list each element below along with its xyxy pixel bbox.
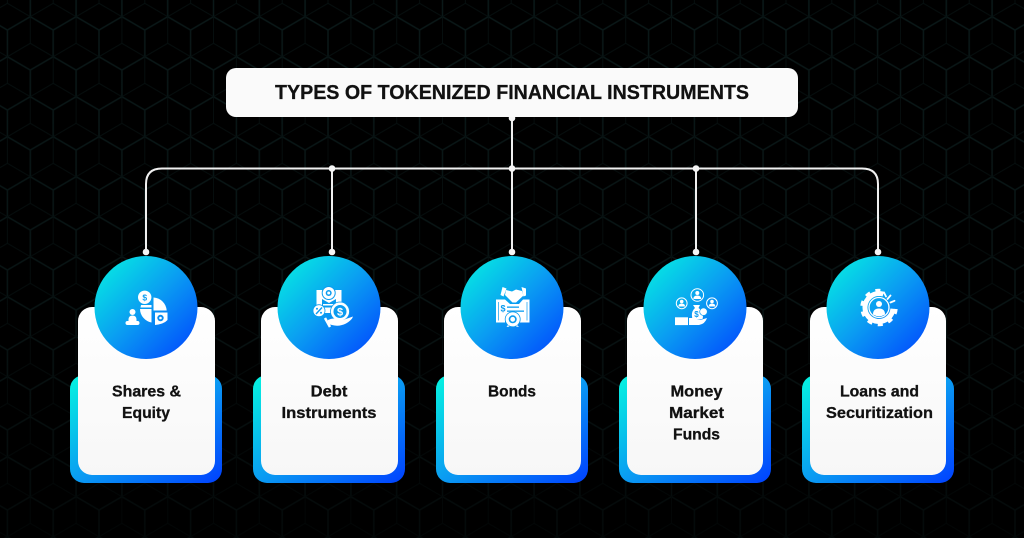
label: loans and securitization: Securitization (826, 405, 933, 422)
panel: loans and securitization (802, 256, 954, 483)
icon circle (826, 256, 930, 359)
label: debt instruments: Debt (311, 384, 347, 401)
label: shares and equity: Shares & (112, 384, 181, 401)
panel: debt instruments (253, 256, 405, 483)
gradient back card (619, 375, 771, 483)
label: money market funds (669, 384, 724, 443)
title: TYPES OF TOKENIZED FINANCIAL INSTRUMENTS (275, 81, 749, 104)
label: debt instruments: Instruments (282, 405, 376, 422)
panel: shares and equity (70, 256, 222, 483)
white card (78, 307, 215, 475)
icon: investors and money bag (675, 289, 717, 325)
label: loans and securitization (826, 384, 933, 422)
label: debt instruments (282, 384, 376, 422)
icon: debt documents and coins (313, 286, 353, 327)
panel: bonds (436, 256, 588, 483)
label: money market funds: Market (669, 405, 724, 422)
label: bonds: Bonds (488, 384, 536, 401)
icon: handshake and certificate: $ (500, 304, 506, 314)
label: money market funds: Funds (673, 426, 720, 443)
gradient back card (802, 375, 954, 483)
gradient back card (253, 375, 405, 483)
white card (810, 307, 946, 475)
gradient back card (436, 375, 588, 483)
white card (627, 307, 763, 475)
icon: shares pie and investor: $ (142, 292, 147, 302)
icon: investors and money bag: $ (694, 310, 699, 319)
gradient back card (70, 375, 222, 483)
icon circle (94, 256, 198, 359)
white card (261, 307, 398, 475)
connector lines (143, 115, 881, 255)
label: shares and equity (112, 384, 181, 422)
panel: money market funds (619, 256, 771, 483)
icon: debt documents and coins: $ (337, 306, 343, 318)
icon circle (644, 256, 746, 359)
title (226, 68, 798, 117)
icon circle (460, 256, 564, 359)
icon: shares pie and investor (126, 291, 168, 325)
white card (444, 307, 581, 475)
icon: gear with person (861, 289, 897, 326)
label: shares and equity: Equity (122, 405, 170, 422)
icon: handshake and certificate (496, 287, 530, 327)
icon circle (278, 256, 380, 359)
label: loans and securitization: Loans and (840, 384, 919, 401)
label: money market funds: Money (670, 384, 723, 401)
